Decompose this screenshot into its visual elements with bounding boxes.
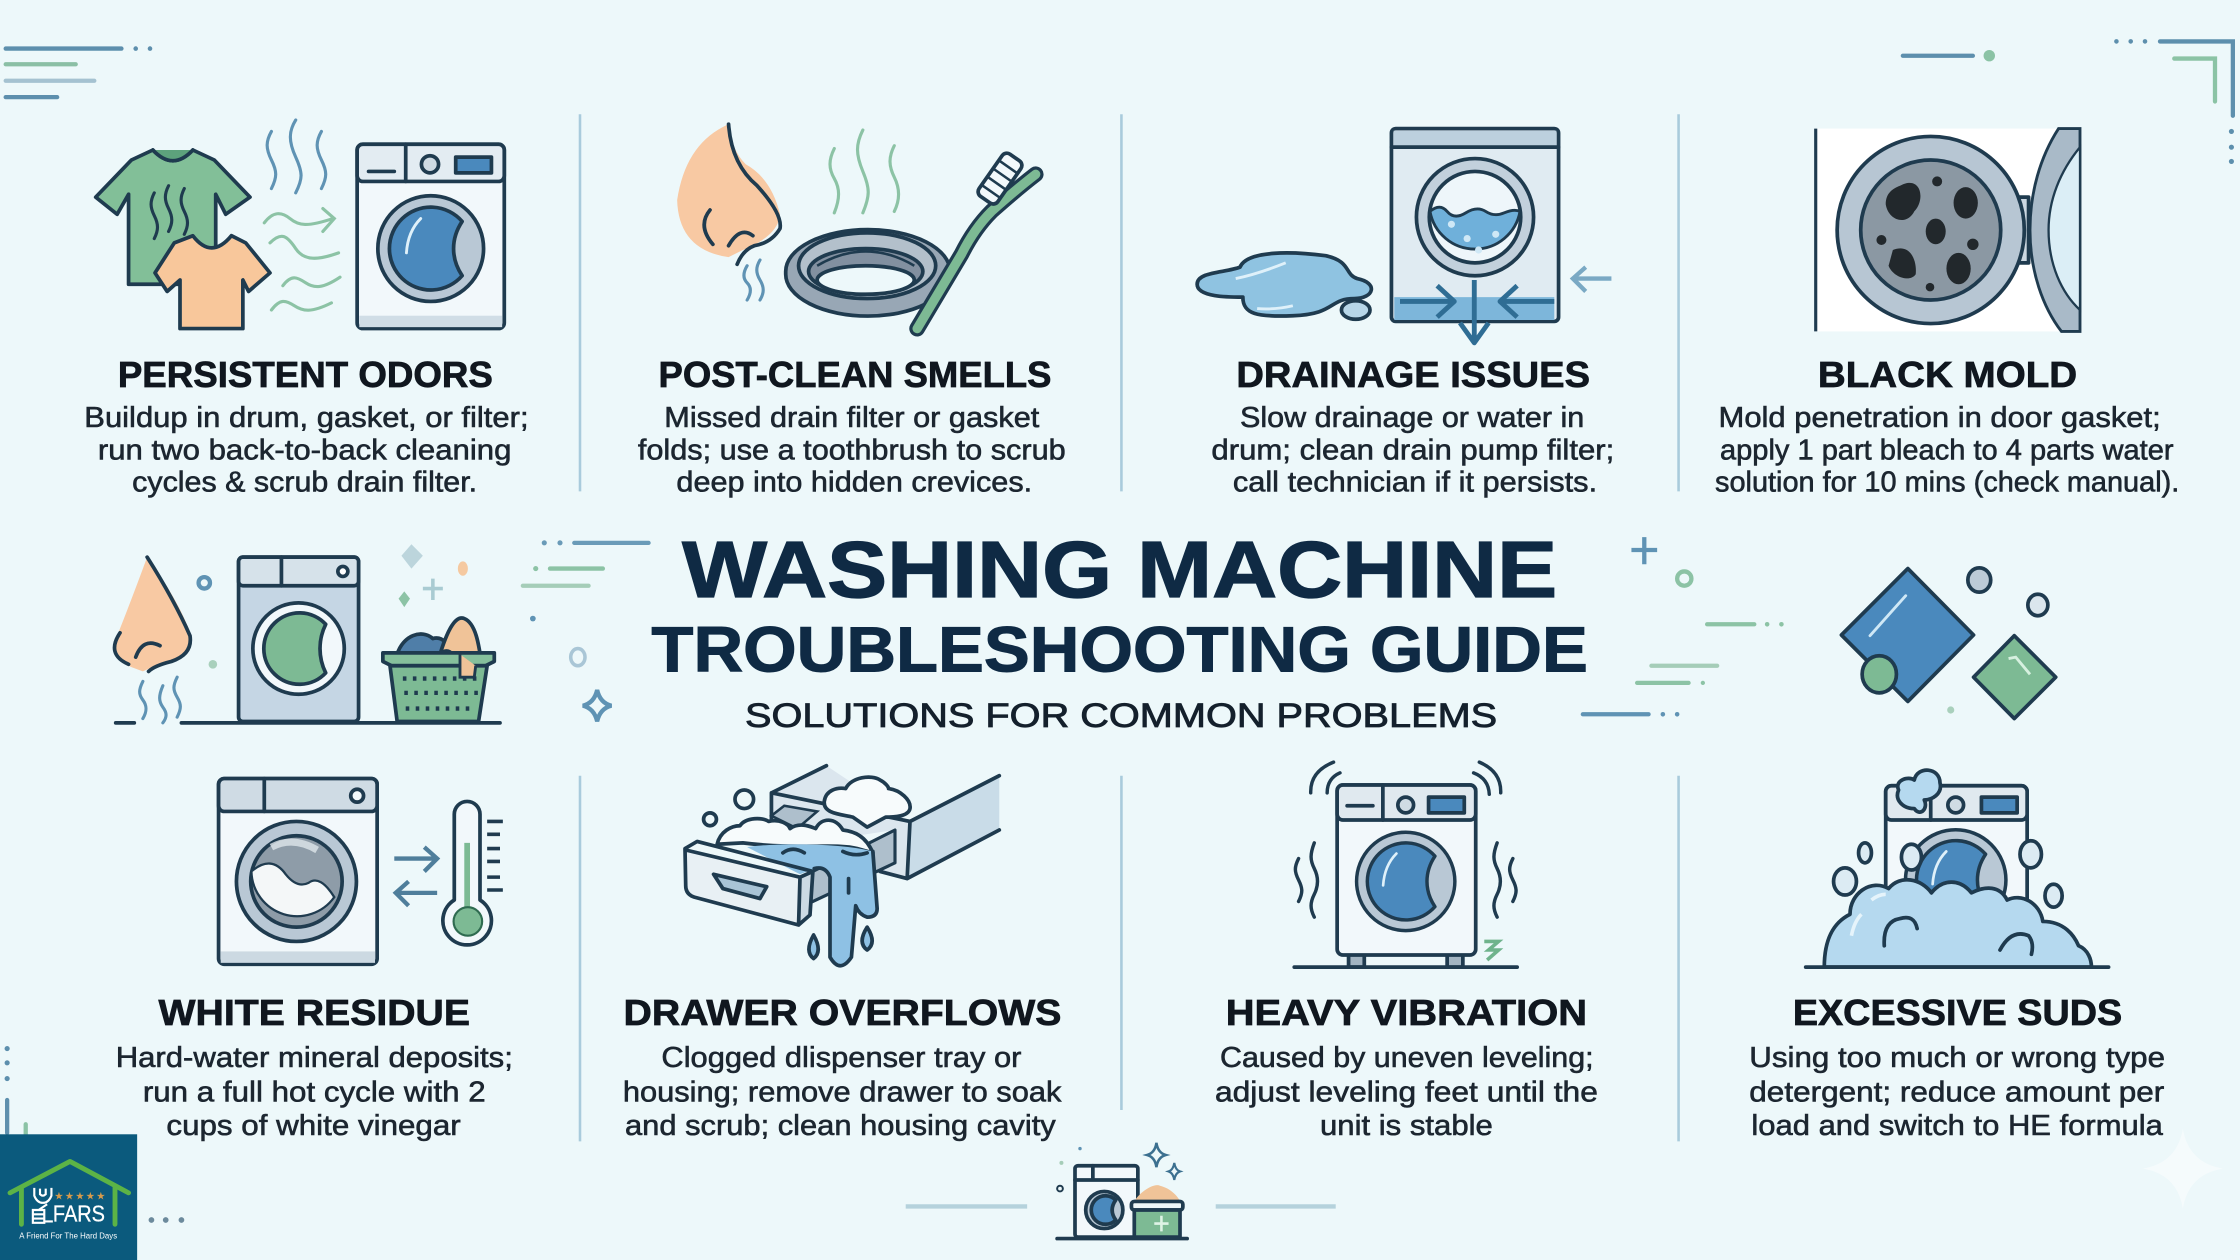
heading: HEAVY VIBRATION (1226, 993, 1587, 1033)
description: adjust leveling feet until the (1215, 1076, 1598, 1108)
icon: vibrating washer (1294, 762, 1517, 967)
logo stars: ★★★★★ (54, 1190, 106, 1202)
icon: overflowing detergent drawer (685, 766, 999, 966)
description: Buildup in drum, gasket, or filter; (84, 402, 529, 434)
description: cups of white vinegar (166, 1110, 461, 1142)
icon: puddle, washer with water and arrows (1197, 129, 1611, 343)
description (1749, 1042, 2165, 1142)
description (1215, 1042, 1598, 1142)
heading: BLACK MOLD (1818, 355, 2077, 395)
logo: FARS badge (0, 1134, 137, 1260)
description: Mold penetration in door gasket; (1719, 402, 2161, 434)
title line one: WASHING MACHINE (682, 525, 1557, 614)
icon: washer buried in suds (1806, 770, 2109, 967)
description (638, 402, 1066, 498)
description: housing; remove drawer to soak (623, 1076, 1062, 1108)
logo wrench (33, 1188, 53, 1223)
description: Missed drain filter or gasket (664, 402, 1039, 434)
heading: WHITE RESIDUE (159, 993, 470, 1033)
description: Caused by uneven leveling; (1220, 1042, 1594, 1074)
description: detergent; reduce amount per (1749, 1076, 2165, 1108)
description: load and switch to HE formula (1751, 1110, 2163, 1142)
description: Using too much or wrong type (1749, 1042, 2165, 1074)
decorative lines: top right (1903, 39, 2234, 164)
panel: excessive suds (1749, 770, 2165, 1142)
description: drum; clean drain pump filter; (1211, 434, 1614, 466)
title block (651, 525, 1588, 735)
heading: EXCESSIVE SUDS (1793, 993, 2122, 1033)
heading: PERSISTENT ODORS (118, 355, 493, 395)
panel: black mold (1715, 129, 2179, 498)
decorative sparkle (2143, 1129, 2223, 1209)
footer icon: small washer and detergent box (906, 1143, 1336, 1239)
panel: post-clean smells (638, 124, 1066, 498)
icon: nose, gasket and toothbrush (677, 124, 1036, 329)
logo tagline: A Friend For The Hard Days (19, 1231, 117, 1241)
description: cycles & scrub drain filter. (132, 466, 477, 498)
decorative lines: top left (6, 46, 152, 97)
description: deep into hidden crevices. (676, 466, 1032, 498)
icon: shirts, odor waves and washer (96, 120, 504, 329)
heading: DRAWER OVERFLOWS (624, 993, 1061, 1033)
icon: washer with residue and thermometer (219, 779, 503, 964)
logo roof (10, 1161, 129, 1224)
description: and scrub; clean housing cavity (625, 1110, 1056, 1142)
panel: white residue (116, 779, 513, 1142)
description: solution for 10 mins (check manual). (1715, 466, 2179, 498)
description (1715, 402, 2179, 498)
description: run a full hot cycle with 2 (143, 1076, 486, 1108)
laundry basket (383, 618, 494, 721)
heading: POST-CLEAN SMELLS (659, 355, 1051, 395)
description: Slow drainage or water in (1240, 402, 1584, 434)
washer (239, 557, 359, 721)
icon: moldy door gasket (1816, 129, 2080, 331)
panel: drawer overflows (623, 766, 1062, 1142)
description: folds; use a toothbrush to scrub (638, 434, 1066, 466)
nose (115, 557, 192, 671)
logo name: FARS (53, 1200, 105, 1226)
heading: DRAINAGE ISSUES (1236, 355, 1590, 395)
description (116, 1042, 513, 1142)
decorative lines: bottom left (5, 1046, 184, 1223)
description (84, 402, 529, 498)
floating decorations right (1583, 537, 1784, 717)
illustration: detergent pods (1841, 568, 2056, 719)
illustration: nose, washer and laundry basket (115, 557, 500, 723)
description: Clogged dlispenser tray or (661, 1042, 1022, 1074)
column dividers (580, 114, 1679, 1141)
description: Hard-water mineral deposits; (116, 1042, 513, 1074)
panel: persistent odors (84, 120, 529, 498)
panel: drainage issues (1197, 129, 1614, 498)
floating decorations left (199, 540, 649, 721)
description: call technician if it persists. (1233, 466, 1597, 498)
description: run two back-to-back cleaning (98, 434, 511, 466)
description (623, 1042, 1062, 1142)
title line two: TROUBLESHOOTING GUIDE (651, 613, 1588, 685)
description: unit is stable (1320, 1110, 1493, 1142)
description (1211, 402, 1614, 498)
subtitle: SOLUTIONS FOR COMMON PROBLEMS (745, 697, 1497, 735)
panel: heavy vibration (1215, 762, 1598, 1142)
description: apply 1 part bleach to 4 parts water (1720, 434, 2174, 466)
